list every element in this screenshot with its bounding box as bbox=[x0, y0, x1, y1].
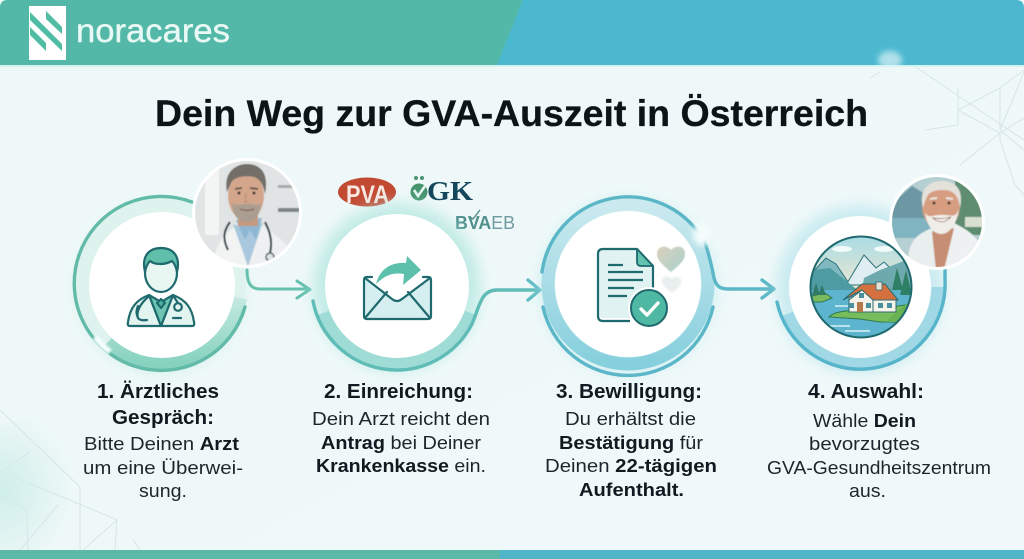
step 3 text bbox=[545, 381, 717, 500]
logo: ÖGK bbox=[410, 176, 473, 206]
insurer logos bbox=[338, 176, 515, 233]
glow bbox=[540, 198, 716, 374]
ring bbox=[777, 270, 945, 369]
inner band bbox=[323, 313, 471, 364]
ring top with connector arrow 3 bbox=[542, 197, 774, 375]
step 4 text bbox=[767, 381, 991, 501]
header band bbox=[0, 0, 1024, 69]
step 2 text bbox=[312, 381, 490, 476]
footer band bbox=[0, 550, 1024, 559]
step 3 text: Deinen 22-tägigen bbox=[545, 456, 717, 476]
step 4 circle bbox=[776, 205, 945, 373]
step 3 text: 3. Bewilligung: bbox=[556, 381, 702, 403]
ring with connector arrow 2 bbox=[313, 280, 540, 370]
background soft blob bbox=[0, 420, 90, 559]
glow bbox=[77, 205, 245, 373]
white disc bbox=[789, 216, 931, 358]
step 4 text: 4. Auswahl: bbox=[808, 381, 924, 403]
white disc bbox=[89, 212, 235, 358]
logo: ÖGK: GK bbox=[427, 176, 473, 206]
step 1 text: 1. Ärztliches bbox=[97, 380, 219, 403]
logo mark bbox=[29, 6, 66, 60]
step 2 circle bbox=[313, 203, 540, 371]
senior portrait bbox=[889, 174, 985, 270]
step 3 text: Aufenthalt. bbox=[579, 480, 684, 500]
logo: noracares bbox=[29, 6, 230, 60]
doctor portrait bbox=[192, 158, 302, 268]
inner band bbox=[787, 287, 938, 365]
connector arrow 1 bbox=[247, 270, 310, 298]
white disc bbox=[325, 214, 469, 358]
glow bbox=[776, 205, 944, 373]
white disc bbox=[555, 211, 701, 357]
step 2 text: Dein Arzt reicht den bbox=[312, 409, 490, 429]
step 1 text: um eine Überwei- bbox=[83, 458, 243, 478]
icon: doctor bbox=[128, 248, 194, 326]
step 4 text: bevorzugtes bbox=[809, 434, 920, 454]
step 1 text: sung. bbox=[139, 481, 187, 501]
inner band bbox=[548, 204, 708, 364]
inner band bbox=[107, 298, 240, 364]
pale fill bbox=[76, 198, 246, 368]
step 3 circle bbox=[540, 197, 774, 375]
step 2 text: Krankenkasse ein. bbox=[316, 456, 486, 476]
title: Dein Weg zur GVA-Auszeit in Österreich bbox=[155, 93, 868, 134]
icon: envelope with arrow bbox=[364, 256, 431, 319]
step 3 text: Du erhältst die bbox=[565, 409, 696, 429]
step 4 text: aus. bbox=[849, 481, 886, 501]
step 1 text: Gespräch: bbox=[112, 407, 214, 429]
logo: PVA: PVA bbox=[346, 181, 389, 209]
ring bbox=[74, 196, 245, 370]
icon: approved document bbox=[598, 247, 685, 329]
step 2 text: 2. Einreichung: bbox=[324, 381, 473, 403]
logo wordmark: noracares bbox=[76, 12, 230, 49]
icon: lake and mountain landscape bbox=[808, 236, 915, 340]
step 1 circle bbox=[74, 196, 246, 373]
step 1 text: Bitte Deinen Arzt bbox=[84, 434, 239, 454]
step 3 text: Bestätigung für bbox=[559, 433, 703, 453]
glow bbox=[313, 203, 481, 371]
step 1 text bbox=[83, 380, 243, 501]
step 4 text: GVA-Gesundheitszentrum bbox=[767, 458, 991, 478]
step 2 text: Antrag bei Deiner bbox=[321, 433, 481, 453]
icon: hearts bbox=[657, 247, 685, 293]
step 4 text: Wähle Dein bbox=[813, 411, 916, 431]
logo: BVAEB: BVAEB bbox=[455, 213, 515, 233]
